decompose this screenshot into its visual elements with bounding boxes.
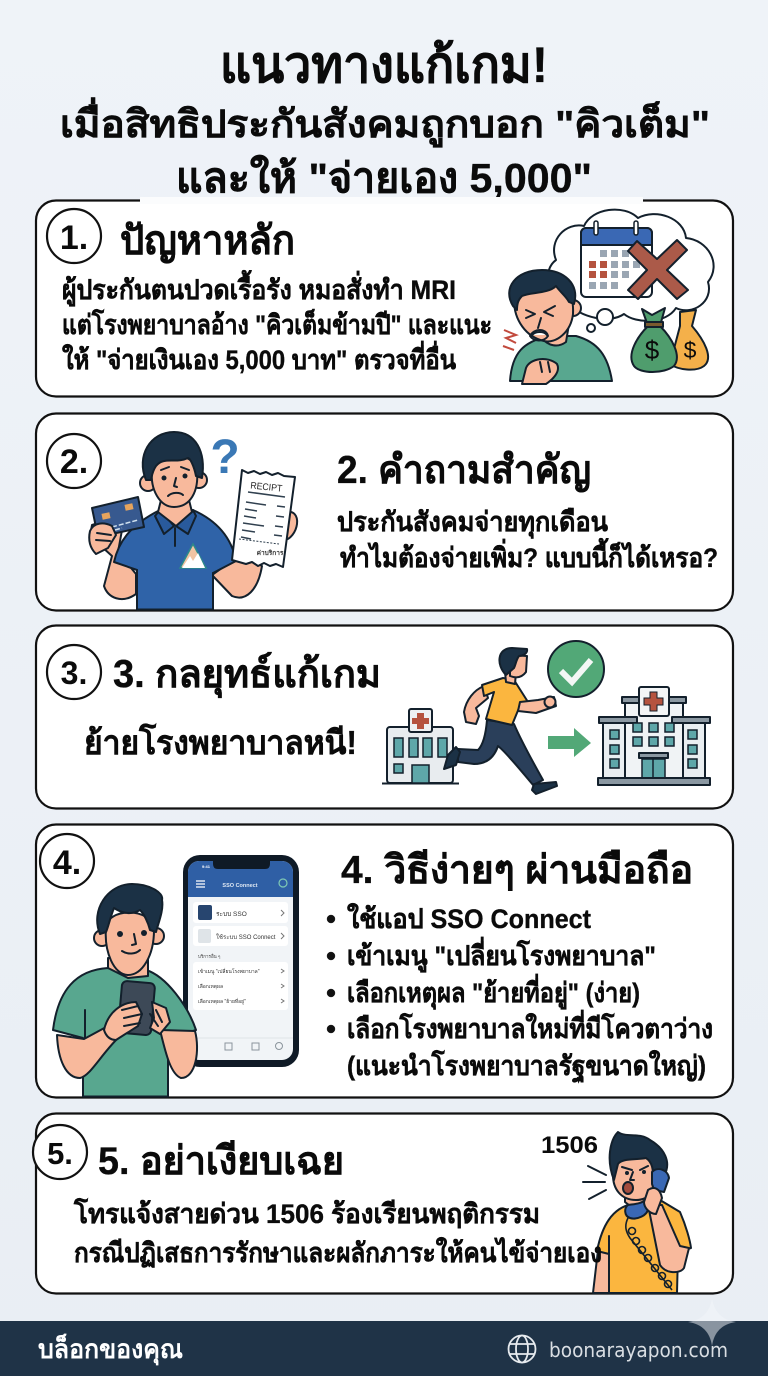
icon: phone with SSO Connect app: 9:41 bbox=[202, 864, 211, 869]
icon: money bags: $ bbox=[645, 335, 660, 365]
number badge 4: 4. bbox=[53, 844, 81, 882]
number badge 2 bbox=[47, 434, 101, 488]
text block: problem description: ผู้ประกันตนปวดเรื้อรัง หมอสั่งทำ MRI bbox=[62, 269, 456, 307]
text block: problem description: แต่โรงพยาบาลอ้าง "คิวเต็มข้ามปี" และแนะ bbox=[62, 307, 492, 340]
icon: running man bbox=[444, 648, 557, 794]
list: steps: เลือกเหตุผล "ย้ายที่อยู่" (ง่าย) bbox=[347, 973, 640, 1010]
icon: phone with SSO Connect app: ระบบ SSO bbox=[216, 911, 247, 918]
heading: strategy: 3. กลยุทธ์แก้เกม bbox=[113, 651, 381, 698]
icon: shout lines bbox=[583, 1166, 606, 1199]
number badge 2: 2. bbox=[60, 443, 88, 481]
text block: problem description bbox=[62, 269, 492, 375]
title: แนวทางแก้เกม! bbox=[220, 37, 548, 93]
text block: hotline: กรณีปฏิเสธการรักษาและผลักภาระให้คนไข้จ่ายเอง bbox=[74, 1237, 602, 1268]
list: steps: เข้าเมนู "เปลี่ยนโรงพยาบาล" bbox=[347, 936, 656, 973]
panel: 4 how to bbox=[36, 824, 733, 1098]
list: steps: ใช้แอป SSO Connect bbox=[347, 903, 591, 934]
icon: man with card and receipt bbox=[89, 431, 297, 610]
icon: man with card and receipt: ? bbox=[210, 431, 240, 484]
text block: question: ประกันสังคมจ่ายทุกเดือน bbox=[337, 507, 609, 539]
icon: man in pain bbox=[503, 270, 612, 384]
arrow: to new hospital bbox=[548, 728, 591, 757]
number badge 1: 1. bbox=[60, 219, 88, 257]
icon: phone with SSO Connect app: เข้าเมนู "เปลี่ยนโรงพยาบาล" bbox=[198, 968, 260, 975]
icon: thought bubble with crossed calendar bbox=[548, 210, 714, 332]
heading: key question: 2. คำถามสำคัญ bbox=[337, 449, 591, 493]
heading: how to: 4. วิธีง่ายๆ ผ่านมือถือ bbox=[341, 849, 693, 892]
list: steps bbox=[327, 903, 713, 1084]
icon: man with card and receipt: RECIPT bbox=[250, 480, 283, 495]
text block: hotline: โทรแจ้งสายด่วน 1506 ร้องเรียนพฤติกรรม bbox=[73, 1197, 540, 1229]
icon: money bags bbox=[631, 308, 708, 372]
icon: phone with SSO Connect app: เลือกเหตุผล bbox=[198, 983, 223, 990]
icon: old hospital bbox=[382, 709, 459, 784]
text block: problem description: ให้ "จ่ายเงินเอง 5,000 บาท" ตรวจที่อื่น bbox=[62, 340, 456, 375]
icon: man with card and receipt: ค่าบริการ bbox=[257, 549, 284, 557]
logo on shirt bbox=[180, 544, 206, 568]
icon: phone with SSO Connect app: เลือกเหตุผล "ย้ายที่อยู่" bbox=[198, 998, 246, 1005]
icon: new hospital bbox=[598, 687, 710, 785]
heading: do not stay silent: 5. อย่าเงียบเฉย bbox=[98, 1140, 344, 1183]
title: เมื่อสิทธิประกันสังคมถูกบอก "คิวเต็ม" bbox=[60, 97, 710, 148]
number badge 4 bbox=[40, 834, 94, 888]
heading: main problem: ปัญหาหลัก bbox=[120, 219, 295, 264]
footer label: บล็อกของคุณ bbox=[38, 1333, 183, 1366]
number badge 3 bbox=[47, 645, 101, 699]
text block: question: ทำไมต้องจ่ายเพิ่ม? แบบนี้ก็ได้เหรอ? bbox=[340, 537, 718, 573]
list: steps: เลือกโรงพยาบาลใหม่ที่มีโควตาว่าง bbox=[347, 1009, 713, 1044]
hotline number: 1506 bbox=[541, 1132, 598, 1159]
icon: globe bbox=[508, 1336, 536, 1362]
panel: 5 do not stay silent bbox=[33, 1114, 733, 1294]
icon: phone with SSO Connect app: ใช้ระบบ SSO Connect bbox=[216, 933, 276, 941]
icon: check mark bbox=[548, 641, 604, 697]
icon: angry man on phone bbox=[593, 1132, 691, 1293]
list: steps: (แนะนำโรงพยาบาลรัฐขนาดใหญ่) bbox=[347, 1049, 706, 1084]
phone in hand bbox=[118, 981, 155, 1035]
sparkle bbox=[688, 1298, 736, 1346]
text block: move hospital: ย้ายโรงพยาบาลหนี! bbox=[84, 723, 357, 761]
number badge 1 bbox=[47, 209, 101, 263]
title: และให้ "จ่ายเอง 5,000" bbox=[176, 154, 592, 201]
number badge 5 bbox=[33, 1125, 87, 1179]
icon: phone with SSO Connect app: บริการอื่น ๆ bbox=[198, 953, 221, 959]
text block: hotline bbox=[73, 1197, 602, 1268]
website address: boonarayapon.com bbox=[549, 1338, 728, 1362]
icon: man using phone bbox=[53, 884, 197, 1096]
number badge 5: 5. bbox=[47, 1136, 73, 1171]
panel: 2 key question bbox=[36, 414, 733, 610]
panel: 1 main problem bbox=[36, 197, 733, 396]
footer bar bbox=[0, 1298, 768, 1376]
text block: question bbox=[337, 507, 718, 573]
panel: 3 strategy bbox=[36, 626, 733, 808]
number badge 3: 3. bbox=[61, 655, 87, 691]
title bbox=[60, 37, 710, 201]
icon: phone with SSO Connect app bbox=[183, 855, 299, 1067]
icon: phone with SSO Connect app: SSO Connect bbox=[222, 883, 258, 889]
icon: money bags: $ bbox=[684, 337, 697, 363]
